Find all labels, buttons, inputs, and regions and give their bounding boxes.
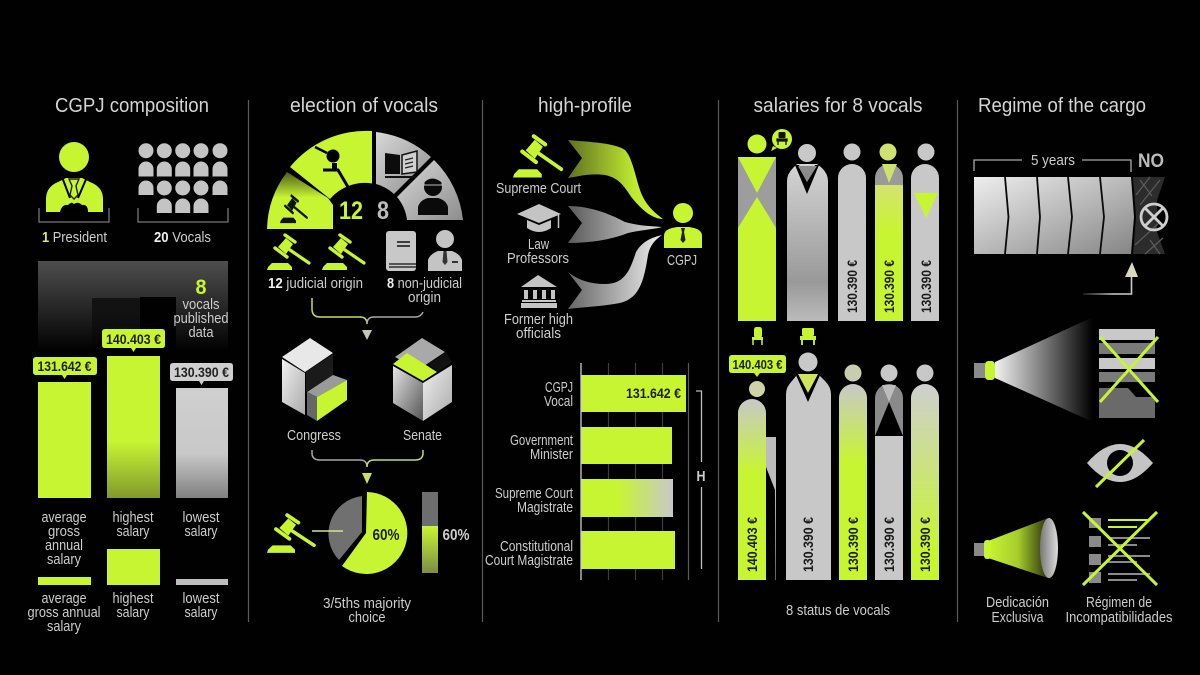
- callout: 8 vocals published data: data: [188, 325, 214, 341]
- labels: small bar captions: gross annual: [28, 605, 100, 621]
- heading: high-profile: high-profile: [538, 95, 632, 117]
- icon: small chair: [752, 327, 763, 345]
- value label: 131.642: [33, 357, 97, 379]
- labels: bar names: [485, 380, 573, 569]
- value: 60 percent: 60%: [372, 527, 400, 544]
- heading: Regime of the cargo: Regime of the cargo: [978, 95, 1146, 117]
- icon: judge dark: [315, 147, 348, 187]
- chart: 60 percent bar: 60%: [442, 527, 470, 544]
- icon: open book: [385, 151, 417, 177]
- bracket: 5 years: [974, 153, 1131, 172]
- wedge: book: [376, 132, 431, 194]
- label: Régimen de Incompatibilidades: [1066, 595, 1172, 626]
- labels: bar captions: [42, 510, 220, 568]
- bar chart: salaries: [33, 329, 233, 498]
- label: Former high officials: officials: [516, 326, 561, 342]
- labels: small bar captions: salary: [47, 619, 82, 635]
- value label: 131.642: 131.642 €: [38, 358, 92, 374]
- icon: chair bubble: [771, 129, 792, 151]
- bar: CGPJ Vocal: [581, 375, 686, 412]
- label: 12 judicial origin: 12 judicial origin: [268, 276, 363, 292]
- labels: small bar captions: [28, 591, 220, 635]
- labels: bar captions: annual: [45, 538, 83, 554]
- label: Régimen de Incompatibilidades: Incompatibilidades: [1066, 610, 1172, 626]
- labels: small bar captions: highest: [112, 591, 154, 607]
- bar: lowest: [176, 388, 228, 498]
- value label: 130.390: [170, 363, 233, 385]
- callout: 8 vocals published data: 8: [196, 276, 207, 299]
- arrow: origins to chambers: [312, 298, 423, 340]
- label: 8 non-judicial origin: 8 non-judicial: [387, 276, 462, 292]
- callout: 8 vocals published data: vocals: [182, 297, 220, 313]
- icon: armchair: [800, 328, 816, 345]
- figure: bottom 5: 130.390 €: [917, 517, 933, 572]
- icon: law book: [386, 231, 416, 271]
- figure: bottom 3: [839, 364, 867, 580]
- figure: bottom 3: 130.390 €: [845, 517, 861, 572]
- labels: bar names: Constitutional: [500, 539, 573, 555]
- label: Supreme Court: Supreme Court: [496, 181, 581, 197]
- figure: bottom 2: [786, 352, 831, 580]
- label: Dedicación Exclusiva: [986, 595, 1049, 626]
- figure: top 5: 130.390 €: [918, 260, 934, 313]
- label: Former high officials: [504, 312, 573, 342]
- bar: Government Minister: [581, 427, 672, 464]
- icon: flashlight beam: [974, 317, 1093, 422]
- caption: majority choice: choice: [348, 610, 386, 626]
- wedge: judge: [290, 131, 372, 199]
- label: Dedicación Exclusiva: Dedicación: [986, 595, 1049, 611]
- labels: bar names: Magistrate: [517, 500, 573, 516]
- label: Dedicación Exclusiva: Exclusiva: [992, 610, 1044, 626]
- caption: majority choice: [323, 596, 412, 626]
- icon: gavel dark: [280, 196, 307, 223]
- label: Law Professors: Law: [528, 237, 549, 253]
- label: CGPJ: CGPJ: [667, 253, 697, 269]
- label: 8 non-judicial origin: [387, 276, 462, 306]
- panel: Regime of the cargo: [974, 95, 1172, 626]
- icon: institution building: [521, 275, 557, 308]
- hatched blocked zone: [1133, 177, 1165, 254]
- figure: bottom 1: 140.403 €: [744, 517, 760, 572]
- figure: top 3: [838, 144, 866, 321]
- label: 20 Vocals: 20 Vocals: [154, 230, 211, 246]
- labels: bar captions: gross: [48, 524, 80, 540]
- labels: bar names: Government: [510, 433, 573, 449]
- panel: election of vocals: [267, 95, 470, 626]
- label: 1 President: 1 President: [42, 230, 107, 246]
- icon: crossed circle: [1141, 204, 1167, 230]
- icon: president: [39, 142, 109, 222]
- wedge: judges bench: [267, 172, 333, 229]
- number: 8: 8: [377, 197, 389, 225]
- bar: Constitutional Court Magistrate: [581, 531, 675, 569]
- label: Régimen de Incompatibilidades: Régimen de: [1086, 595, 1152, 611]
- icon: gavel 1: [267, 235, 309, 270]
- figure: bottom 4: 130.390 €: [881, 517, 897, 572]
- number: 12: 12: [339, 197, 363, 225]
- caption: 8 status de vocals: 8 status de vocals: [786, 603, 890, 619]
- chart: 60 percent bar: [422, 492, 470, 573]
- labels: bar captions: lowest: [182, 510, 220, 526]
- chart: semicircle 12 and 8: [267, 131, 463, 229]
- label: Former high officials: Former high: [504, 312, 573, 328]
- icon: person dark: [418, 178, 448, 215]
- bracket: 5 years: 5 years: [1031, 153, 1075, 169]
- small bars: [38, 549, 228, 585]
- icon: Senate building: [393, 338, 452, 421]
- arrow: law professors flow: [568, 206, 662, 243]
- arrow: former officials flow: [568, 235, 662, 309]
- arrow: re-election blocked: [1083, 262, 1138, 294]
- wedge: person: [397, 160, 463, 220]
- figure: top 3: 130.390 €: [844, 260, 860, 313]
- labels: small bar captions: salary: [184, 605, 218, 621]
- figure: bottom 4: [875, 364, 903, 580]
- bar: highest: [107, 356, 160, 498]
- figure: top 2: [787, 144, 828, 321]
- figure: top 4: [875, 144, 903, 321]
- figure: bottom 5: [911, 364, 939, 580]
- value label: 140.403: 140.403 €: [106, 331, 161, 347]
- labels: bar captions: highest: [112, 510, 154, 526]
- arrow: chambers to vote: [312, 450, 423, 484]
- icon: crossed eye: [1087, 440, 1153, 487]
- label: NO: NO: [1138, 151, 1164, 172]
- icon: crossed list: [1083, 512, 1157, 585]
- icon: megaphone beam: [974, 518, 1058, 578]
- caption: majority choice: 3/5ths majority: [323, 596, 412, 612]
- panel: CGPJ composition: [28, 95, 233, 635]
- heading: CGPJ composition: CGPJ composition: [55, 95, 209, 117]
- icon: gavel 2: [322, 235, 364, 270]
- line: gavel to pie: [312, 530, 343, 532]
- background gradient panel: [38, 261, 228, 352]
- bar: average: [38, 382, 91, 498]
- labels: bar names: Supreme Court: [495, 486, 573, 502]
- bracket: H: H: [696, 468, 706, 485]
- heading: salaries for 8 vocals: salaries for 8 vocals: [754, 95, 922, 117]
- icon: mortarboard: [517, 204, 561, 232]
- icon: supreme court gavel: [513, 136, 561, 177]
- value label: 140.403: [102, 329, 165, 352]
- chart: 60 percent pie: [312, 492, 407, 574]
- arrow: supreme court flow: [568, 140, 663, 219]
- panel: high-profile: [485, 95, 706, 580]
- labels: bar names: Court Magistrate: [485, 553, 573, 569]
- labels: bar captions: average: [42, 510, 86, 526]
- icon: 20 vocals seats: [138, 143, 228, 222]
- callout: 8 vocals published data: [174, 276, 228, 341]
- label: Law Professors: Professors: [507, 251, 569, 267]
- icon: gavel vote: [267, 515, 314, 553]
- figure: top 5: [911, 144, 939, 321]
- value label: 130.390: 130.390 €: [174, 364, 229, 380]
- label: Senate: Senate: [403, 428, 442, 444]
- label: Law Professors: [507, 237, 569, 267]
- icon: non-judicial person: [428, 230, 462, 271]
- figure: top 1 president-style: [738, 129, 792, 321]
- bar: Supreme Court Magistrate: [581, 479, 673, 517]
- bar chart: salary comparison: [485, 363, 706, 580]
- figure: bottom 1: [729, 355, 786, 580]
- labels: small bar captions: average: [42, 591, 86, 607]
- timeline: five year term: [974, 177, 1134, 254]
- heading: election of vocals: election of vocals: [290, 95, 438, 117]
- labels: bar captions: salary: [184, 524, 218, 540]
- value: 131.642: 131.642 €: [626, 385, 681, 401]
- labels: small bar captions: salary: [116, 605, 150, 621]
- value label: 140.403: [729, 355, 786, 377]
- icon: crossed document: [1099, 329, 1158, 418]
- labels: bar captions: salary: [47, 552, 82, 568]
- figure: bottom 2: 130.390 €: [800, 517, 816, 572]
- labels: bar captions: salary: [116, 524, 150, 540]
- labels: bar names: CGPJ: [545, 380, 573, 396]
- labels: bar names: Vocal: [544, 394, 573, 410]
- icon: Congress building: [282, 338, 347, 421]
- label: 8 non-judicial origin: origin: [408, 290, 441, 306]
- figure: top 4: 130.390 €: [881, 260, 897, 313]
- bracket: H: [696, 391, 706, 569]
- value label: 140.403: 140.403 €: [732, 357, 782, 372]
- icon: CGPJ person: [664, 203, 702, 248]
- panel: salaries for 8 vocals: [729, 95, 939, 619]
- labels: small bar captions: lowest: [182, 591, 220, 607]
- label: Congress: Congress: [287, 428, 341, 444]
- labels: bar names: Minister: [530, 447, 573, 463]
- callout: 8 vocals published data: published: [174, 311, 228, 327]
